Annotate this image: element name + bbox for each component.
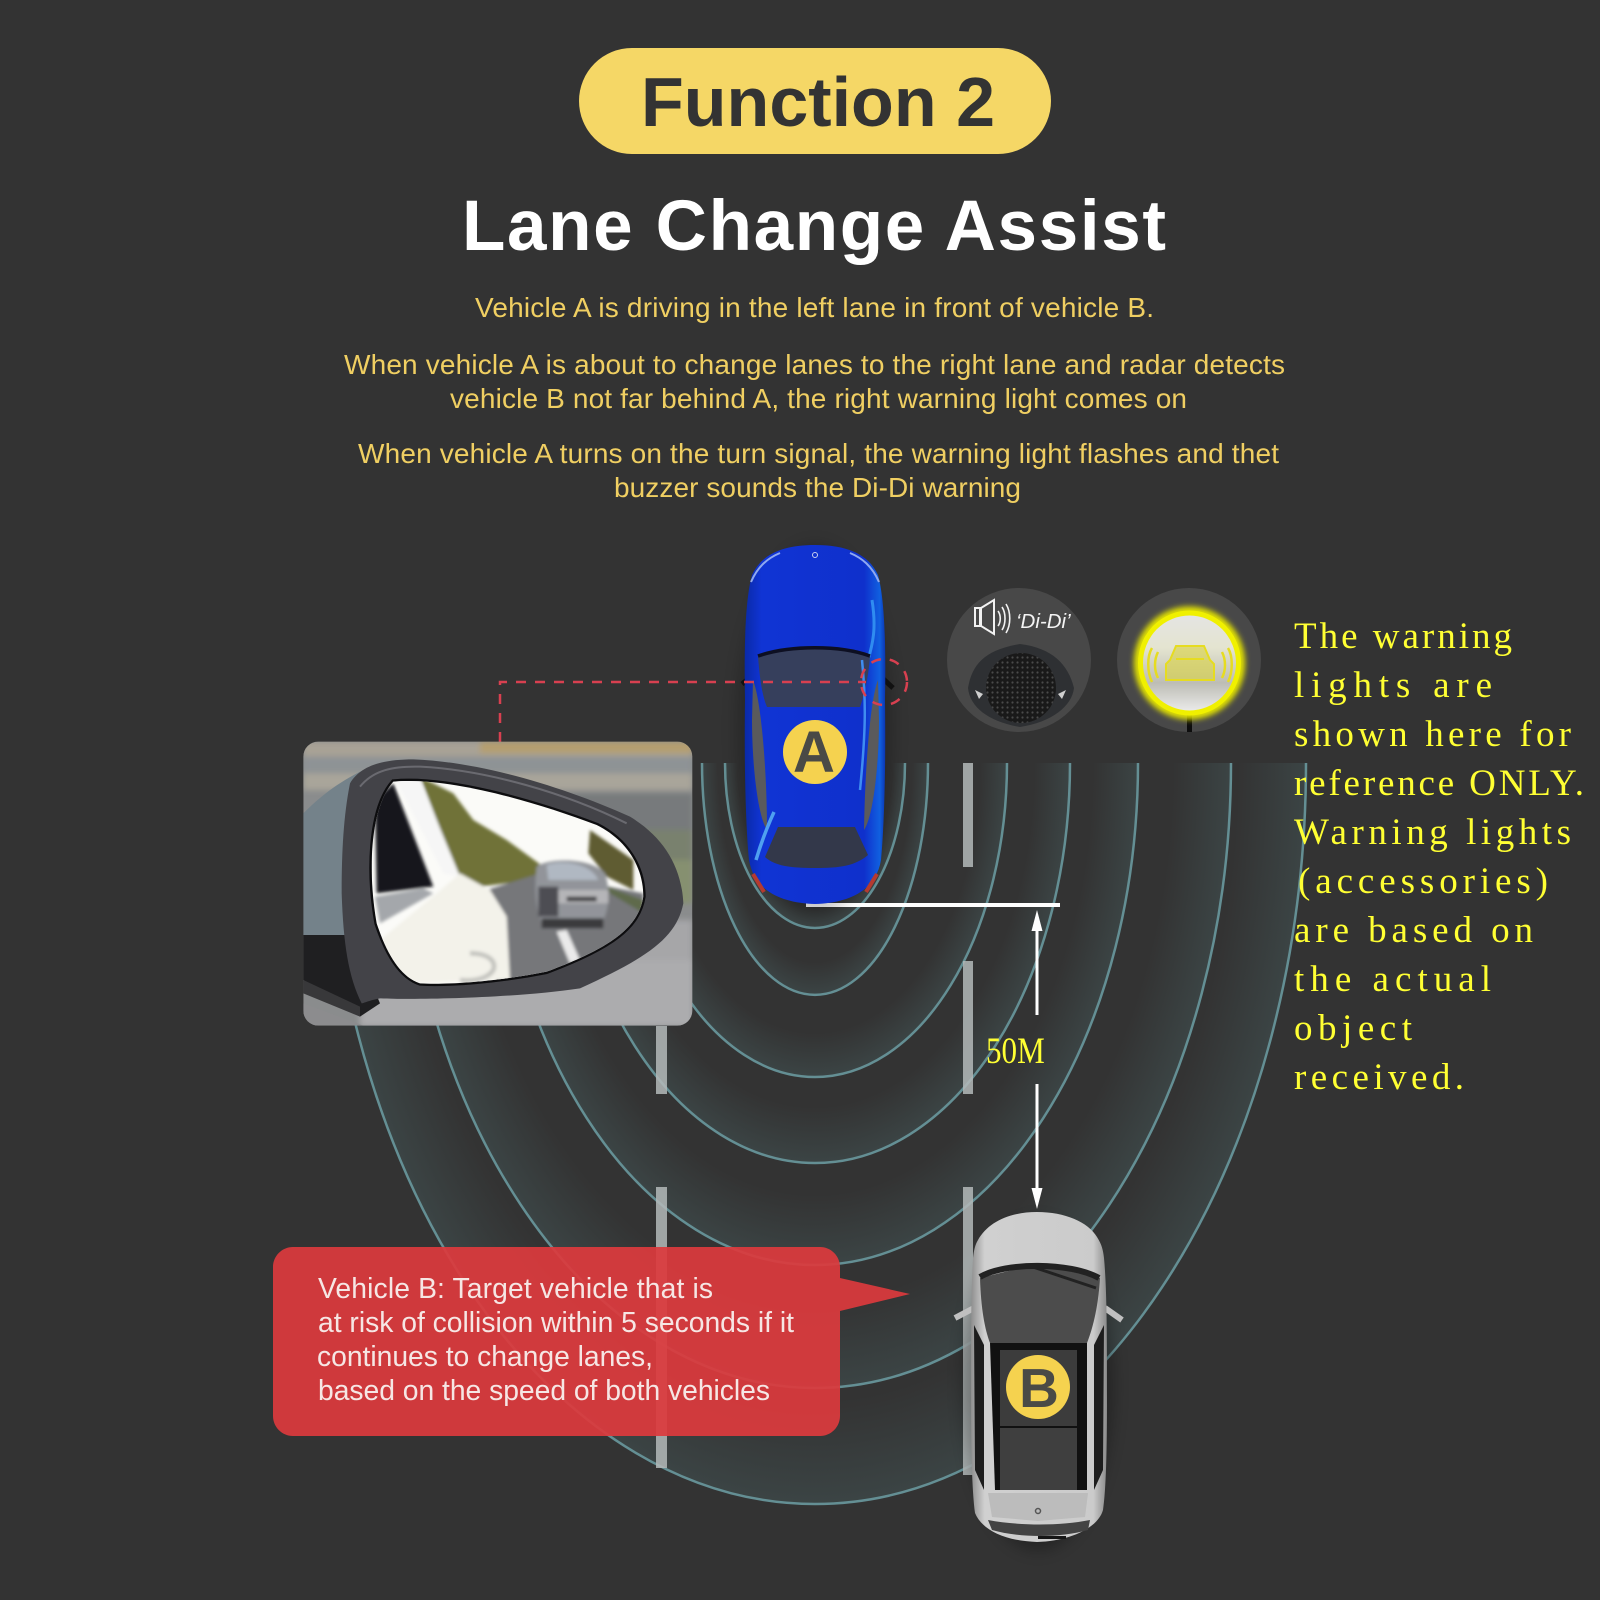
buzzer icon: Di-Di <box>947 588 1091 732</box>
note: warning lights reference text: Warning lights <box>1294 812 1571 853</box>
buzzer icon: Di-Di: ‘Di-Di’ <box>1016 610 1071 633</box>
note: warning lights reference text: object <box>1294 1008 1413 1049</box>
distance indicator: 50M: 50M <box>986 1032 1045 1072</box>
description text block <box>344 292 1285 503</box>
distance indicator: 50M <box>806 903 1060 1209</box>
note: warning lights reference text: reference ONLY. <box>1294 763 1584 804</box>
vehicle A: blue car: A <box>793 720 835 785</box>
callout: Vehicle B: based on the speed of both vehicles <box>318 1374 770 1406</box>
callout: Vehicle B: continues to change lanes, <box>317 1340 653 1372</box>
red dashed connector from mirror <box>500 659 907 742</box>
callout: Vehicle B <box>273 1247 910 1436</box>
vehicle B: silver car <box>955 1212 1122 1550</box>
note: warning lights reference text: The warning <box>1294 616 1512 657</box>
note: warning lights reference text: are based on <box>1294 910 1533 951</box>
description text block: When vehicle A is about to change lanes to the right lane and radar detects <box>344 349 1285 380</box>
description text block: vehicle B not far behind A, the right warning light comes on <box>450 383 1187 414</box>
mirror photo panel <box>303 742 693 1027</box>
note: warning lights reference text <box>1294 616 1584 1098</box>
note: warning lights reference text: lights are <box>1294 665 1492 706</box>
title badge: Function 2 <box>579 48 1051 154</box>
warning light icon <box>1117 588 1261 732</box>
callout: Vehicle B: at risk of collision within 5 seconds if it <box>318 1306 794 1338</box>
heading: Lane Change Assist: Lane Change Assist <box>462 187 1166 266</box>
vehicle B: silver car: B <box>1019 1357 1059 1419</box>
callout: Vehicle B: Vehicle B: Target vehicle that is <box>318 1272 713 1304</box>
note: warning lights reference text: (accessories) <box>1298 861 1548 902</box>
lane markings <box>656 763 973 1475</box>
vehicle A: blue car <box>737 545 893 915</box>
note: warning lights reference text: shown here for <box>1294 714 1571 755</box>
description text block: buzzer sounds the Di-Di warning <box>614 472 1021 503</box>
note: warning lights reference text: received. <box>1294 1057 1464 1098</box>
description text block: When vehicle A turns on the turn signal, the warning light flashes and thet <box>358 438 1279 469</box>
radar wave rings <box>324 763 1306 1504</box>
description text block: Vehicle A is driving in the left lane in front of vehicle B. <box>475 292 1154 323</box>
title badge: Function 2: Function 2 <box>641 63 995 141</box>
note: warning lights reference text: the actual <box>1294 959 1491 1000</box>
